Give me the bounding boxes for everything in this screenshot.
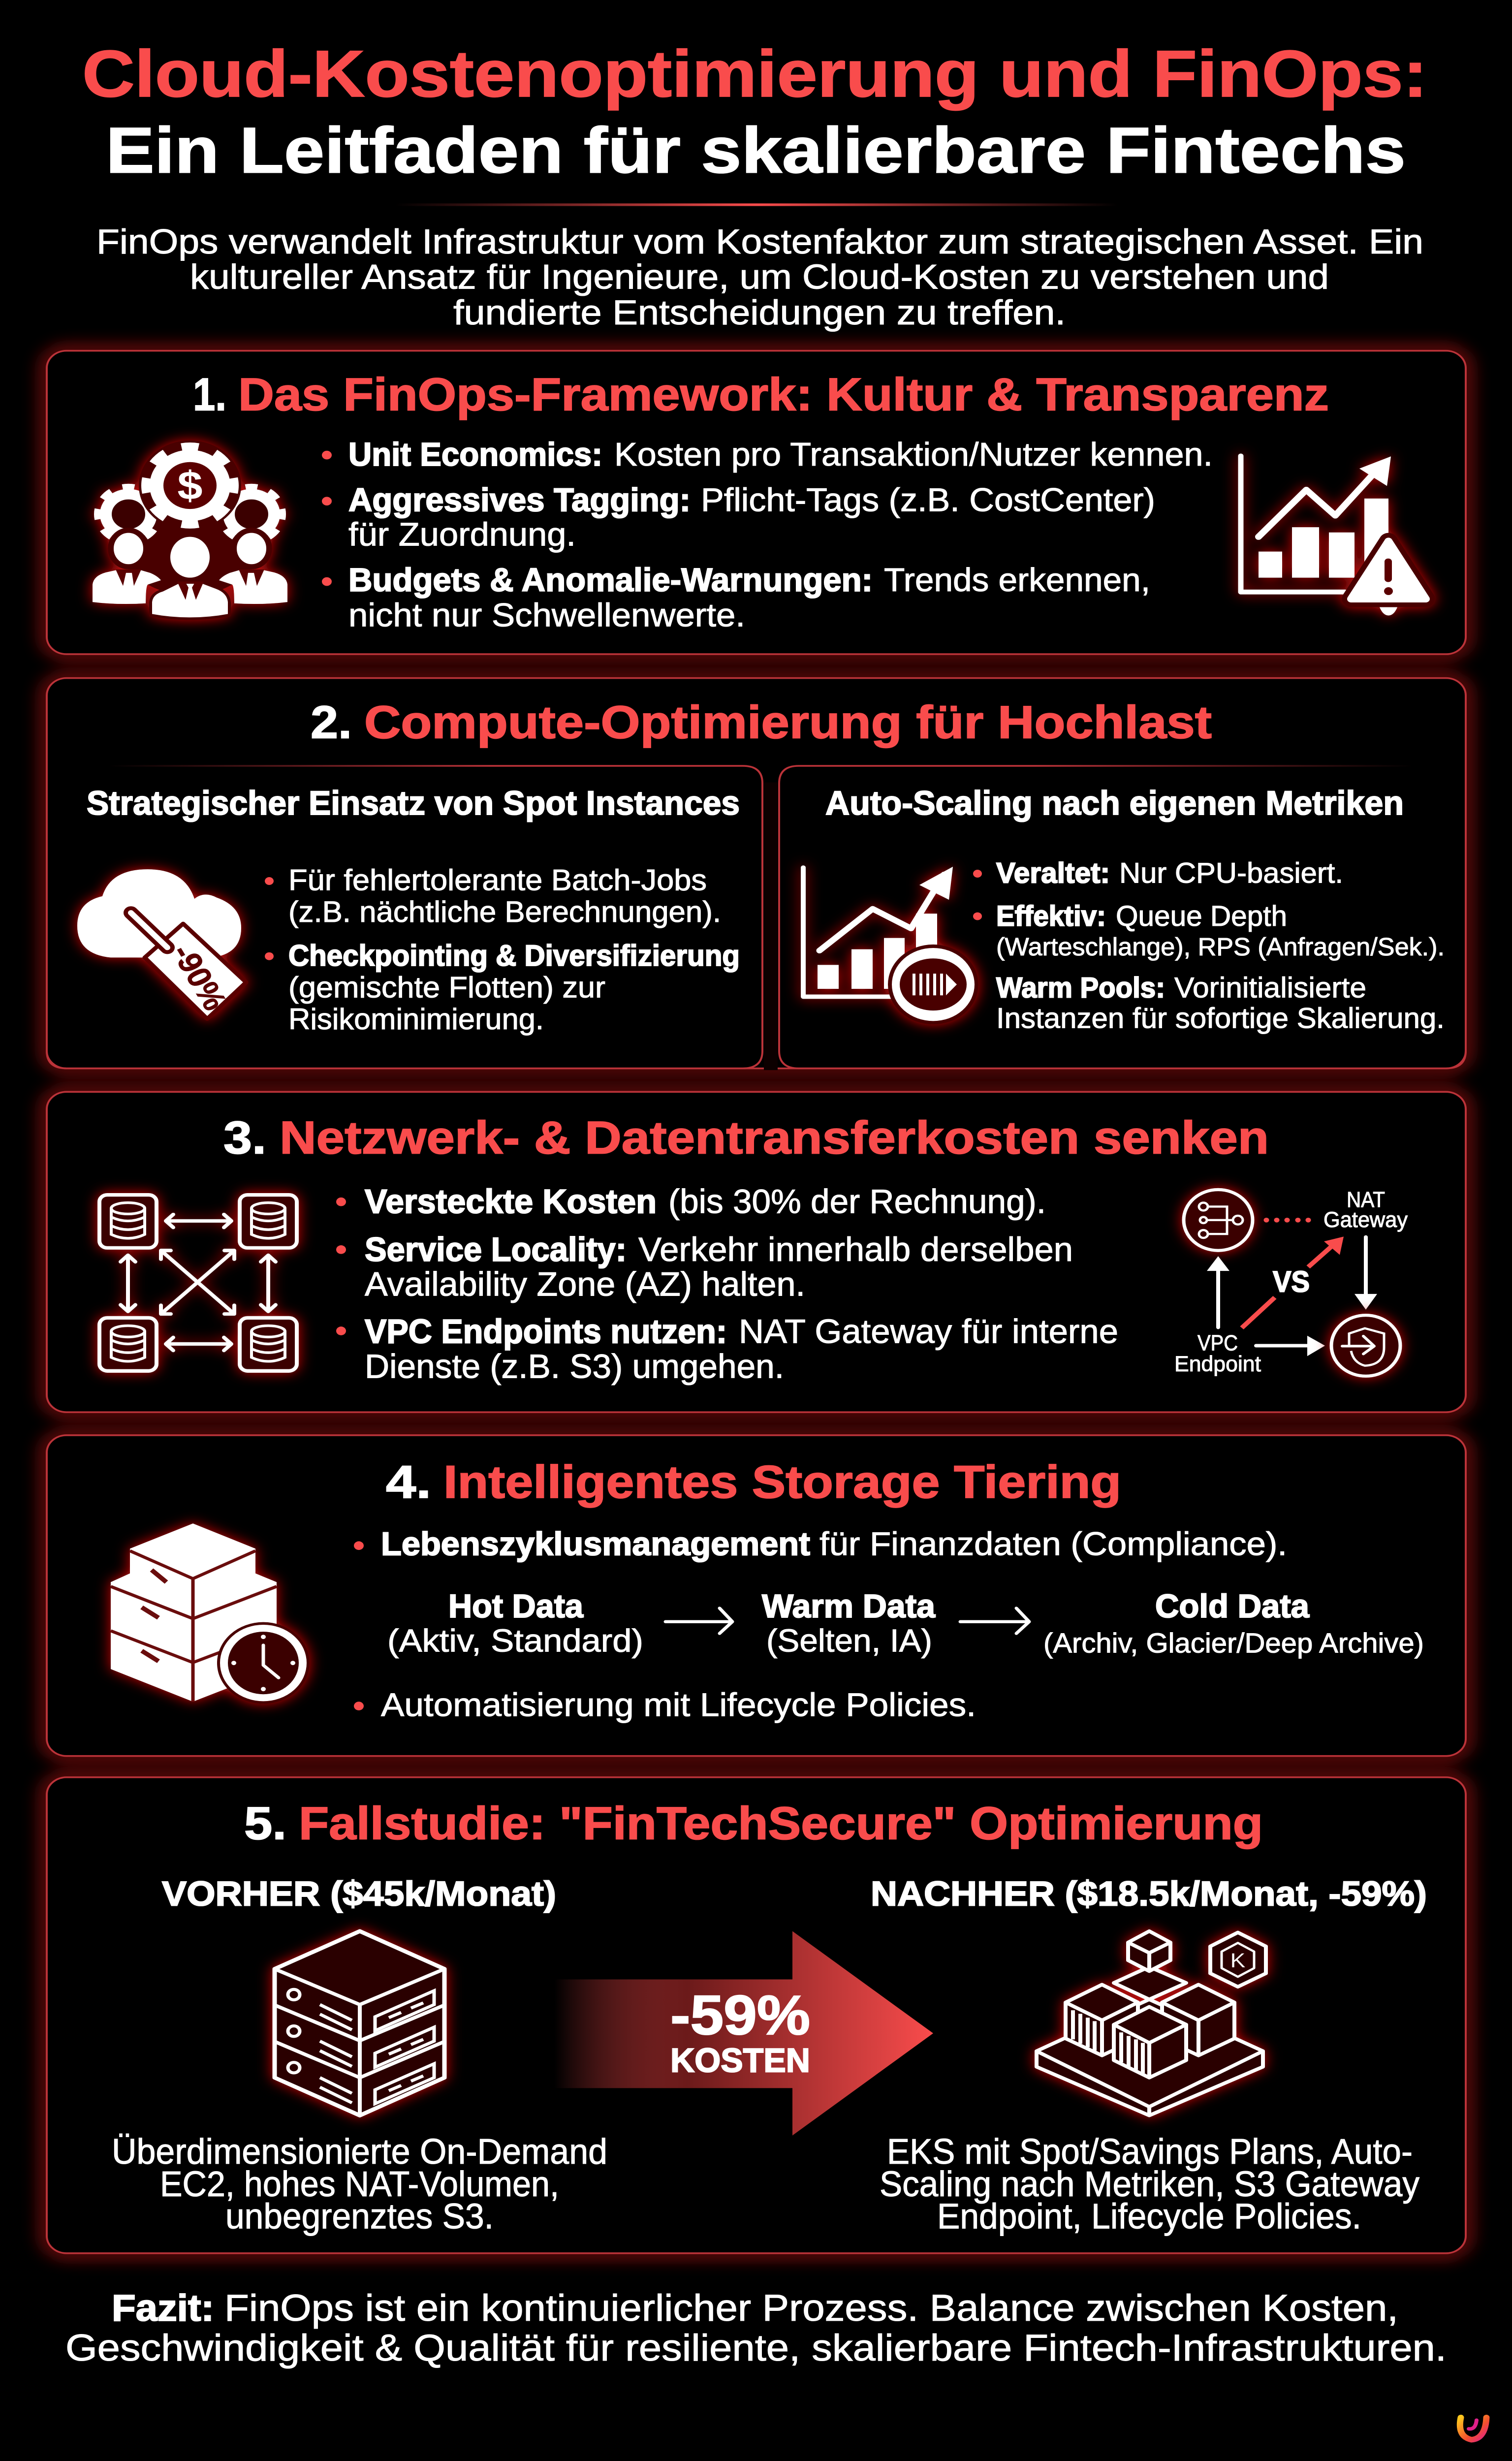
arrow: warm to cold [960,1608,1029,1634]
bullet list: auto-scaling: Nur CPU-basiert. [1119,857,1343,889]
bullet: lifecycle management: Lebenszyklusmanagement [381,1526,810,1563]
bullet list: spot instances: Für fehlertolerante Batch-Jobs [288,863,707,897]
icon: network node circle [1184,1190,1253,1251]
bullet: automation: Automatisierung mit Lifecycle Policies. [381,1686,976,1723]
label: NAT Gateway: NAT [1347,1187,1385,1212]
panel 4 heading: 4. [386,1456,431,1508]
panel 2 heading: Compute-Optimierung für Hochlast [364,696,1212,748]
bullet list: network: Availability Zone (AZ) halten. [365,1265,805,1303]
bullet list: network: Service Locality: [365,1230,627,1268]
text: before description [112,2132,607,2236]
tier: hot data: Hot Data [448,1588,584,1625]
intro text: fundierte Entscheidungen zu treffen. [453,293,1066,332]
label: before: VORHER ($45k/Monat) [162,1874,556,1913]
label: NAT Gateway [1323,1187,1408,1231]
bullet list: network: Versteckte Kosten [365,1182,657,1221]
bullet list: network: NAT Gateway für interne [739,1312,1118,1351]
text: after description: EKS mit Spot/Savings Plans, Auto- [887,2132,1413,2172]
icon: team with gears [93,441,287,619]
title [82,37,1427,187]
icon: database network [99,1195,297,1371]
text: before description: Überdimensionierte On-Demand [112,2132,607,2172]
icon: stacked boxes with clock [111,1523,310,1704]
panel 2: compute optimization [47,678,1466,1070]
panel 4: storage tiering [47,1435,1466,1756]
label: VPC Endpoint: VPC [1197,1330,1238,1355]
bullet list: Unit Economics: [348,436,602,473]
label: VPC Endpoint [1174,1330,1261,1376]
intro text: FinOps verwandelt Infrastruktur vom Kostenfaktor zum strategischen Asset. Ein [96,222,1423,261]
title: Ein Leitfaden für skalierbare Fintechs [106,114,1406,187]
bullet list: spot instances: Risikominimierung. [288,1003,544,1036]
bullet list: auto-scaling: Vorinitialisierte [1174,972,1366,1004]
sub-panel: auto-scaling [779,766,1466,1069]
icon: container cubes with kubernetes [1037,1931,1266,2115]
panel 1 heading: Das FinOps-Framework: Kultur & Transparenz [238,369,1329,420]
label: VS: VS [1273,1265,1310,1298]
big arrow: minus 59 percent: KOSTEN [670,2041,810,2080]
bullet list: für Zuordnung. [348,516,576,553]
tier: cold data: (Archiv, Glacier/Deep Archive) [1043,1627,1424,1659]
bullet list: Pflicht-Tags (z.B. CostCenter) [701,482,1155,518]
bullet list: auto-scaling [973,857,1445,1035]
label: NAT Gateway: Gateway [1323,1207,1408,1231]
icon: shield circle [1331,1315,1400,1376]
big arrow: minus 59 percent: -59% [670,1984,810,2046]
conclusion: Fazit: [112,2287,214,2329]
sub-heading: spot instances: Strategischer Einsatz von Spot Instances [87,784,740,822]
bullet list: Kosten pro Transaktion/Nutzer kennen. [614,436,1213,473]
panel 5 heading: Fallstudie: "FinTechSecure" Optimierung [299,1798,1263,1849]
icon: cloud with price tag [77,869,246,1019]
icon: chart with warning [1241,456,1426,615]
text: after description: Endpoint, Lifecycle Policies. [937,2197,1361,2236]
bullet list: auto-scaling: Veraltet: [996,857,1110,889]
icon: cloud with price tag: -90% [164,939,234,1015]
arrow: hot to warm [665,1608,732,1634]
panel 1 heading: 1. [193,369,226,420]
big arrow: minus 59 percent [554,1931,933,2136]
bullet list: network: VPC Endpoints nutzen: [365,1312,727,1351]
bullet list: Budgets & Anomalie-Warnungen: [348,562,873,599]
bullet: lifecycle management [354,1526,1287,1563]
arrow down [1354,1237,1377,1310]
icon: server stack [275,1931,444,2115]
bullet list: spot instances: (gemischte Flotten) zur [288,971,605,1004]
icon: team with gears: $ [177,464,203,508]
icon: chart with queue [803,867,978,1024]
arrow right [1256,1336,1325,1356]
panel 5: case study [47,1777,1466,2253]
bullet: lifecycle management: für Finanzdaten (Compliance). [819,1526,1287,1563]
bullet list: nicht nur Schwellenwerte. [348,597,745,633]
conclusion [65,2287,1447,2369]
bullet list: auto-scaling: (Warteschlange), RPS (Anfragen/Sek.). [996,932,1445,961]
bullet list: network: (bis 30% der Rechnung). [668,1182,1046,1221]
intro text [96,222,1423,332]
panel 4 heading: Intelligentes Storage Tiering [443,1456,1121,1508]
diagram: VPC endpoint vs NAT gateway [1174,1187,1408,1376]
bullet list [322,436,1213,633]
tier: hot data [387,1588,643,1659]
arrow up [1207,1256,1229,1327]
panel 3 heading: Netzwerk- & Datentransferkosten senken [280,1112,1269,1164]
tier: cold data [1043,1588,1424,1659]
bullet list: auto-scaling: Warm Pools: [996,972,1165,1004]
bullet list: network: Dienste (z.B. S3) umgehen. [365,1347,784,1385]
gap between sub-panels [764,783,778,1070]
logo [1460,2418,1486,2440]
title: Cloud-Kostenoptimierung und FinOps: [82,37,1427,111]
sub-panel: spot instances [47,766,762,1069]
label: after: NACHHER ($18.5k/Monat, -59%) [871,1874,1427,1913]
bullet list: network [336,1182,1118,1385]
bullet list: Trends erkennen, [884,562,1150,599]
red arrow [1242,1236,1344,1328]
tier: cold data: Cold Data [1155,1588,1310,1625]
bullet list: auto-scaling: Instanzen für sofortige Skalierung. [996,1003,1445,1035]
bullet list: auto-scaling: Queue Depth [1116,900,1287,932]
tier: warm data: (Selten, IA) [766,1623,932,1659]
text: after description [880,2132,1419,2236]
tier: warm data [762,1588,936,1659]
text: before description: unbegrenztes S3. [225,2197,494,2236]
bullet list: network: Verkehr innerhalb derselben [638,1230,1073,1268]
text: after description: Scaling nach Metriken, S3 Gateway [880,2165,1419,2204]
bullet list: auto-scaling: Effektiv: [996,900,1106,932]
tier: hot data: (Aktiv, Standard) [387,1623,643,1659]
panel 3: network and data transfer [47,1092,1466,1412]
label: VPC Endpoint: Endpoint [1174,1352,1261,1376]
dotted connector [1264,1218,1311,1223]
sub-heading: auto-scaling: Auto-Scaling nach eigenen Metriken [825,784,1404,822]
panel 3 heading: 3. [223,1112,266,1164]
icon: container cubes with kubernetes: K [1230,1950,1245,1972]
panel 5 heading: 5. [244,1798,286,1849]
panel 2 heading: 2. [311,696,352,748]
bullet list: spot instances [265,863,740,1036]
intro text: kultureller Ansatz für Ingenieure, um Cloud-Kosten zu verstehen und [190,257,1329,296]
bullet list: spot instances: (z.B. nächtliche Berechnungen). [288,895,721,928]
bullet list: spot instances: Checkpointing & Diversifizierung [288,939,740,972]
bullet list: Aggressives Tagging: [348,482,691,518]
conclusion: Geschwindigkeit & Qualität für resiliente, skalierbare Fintech-Infrastrukturen. [65,2328,1447,2369]
tier: warm data: Warm Data [762,1588,936,1625]
text: before description: EC2, hohes NAT-Volumen, [160,2165,559,2204]
conclusion: FinOps ist ein kontinuierlicher Prozess. Balance zwischen Kosten, [224,2287,1398,2329]
panel 1: FinOps framework [47,351,1466,654]
